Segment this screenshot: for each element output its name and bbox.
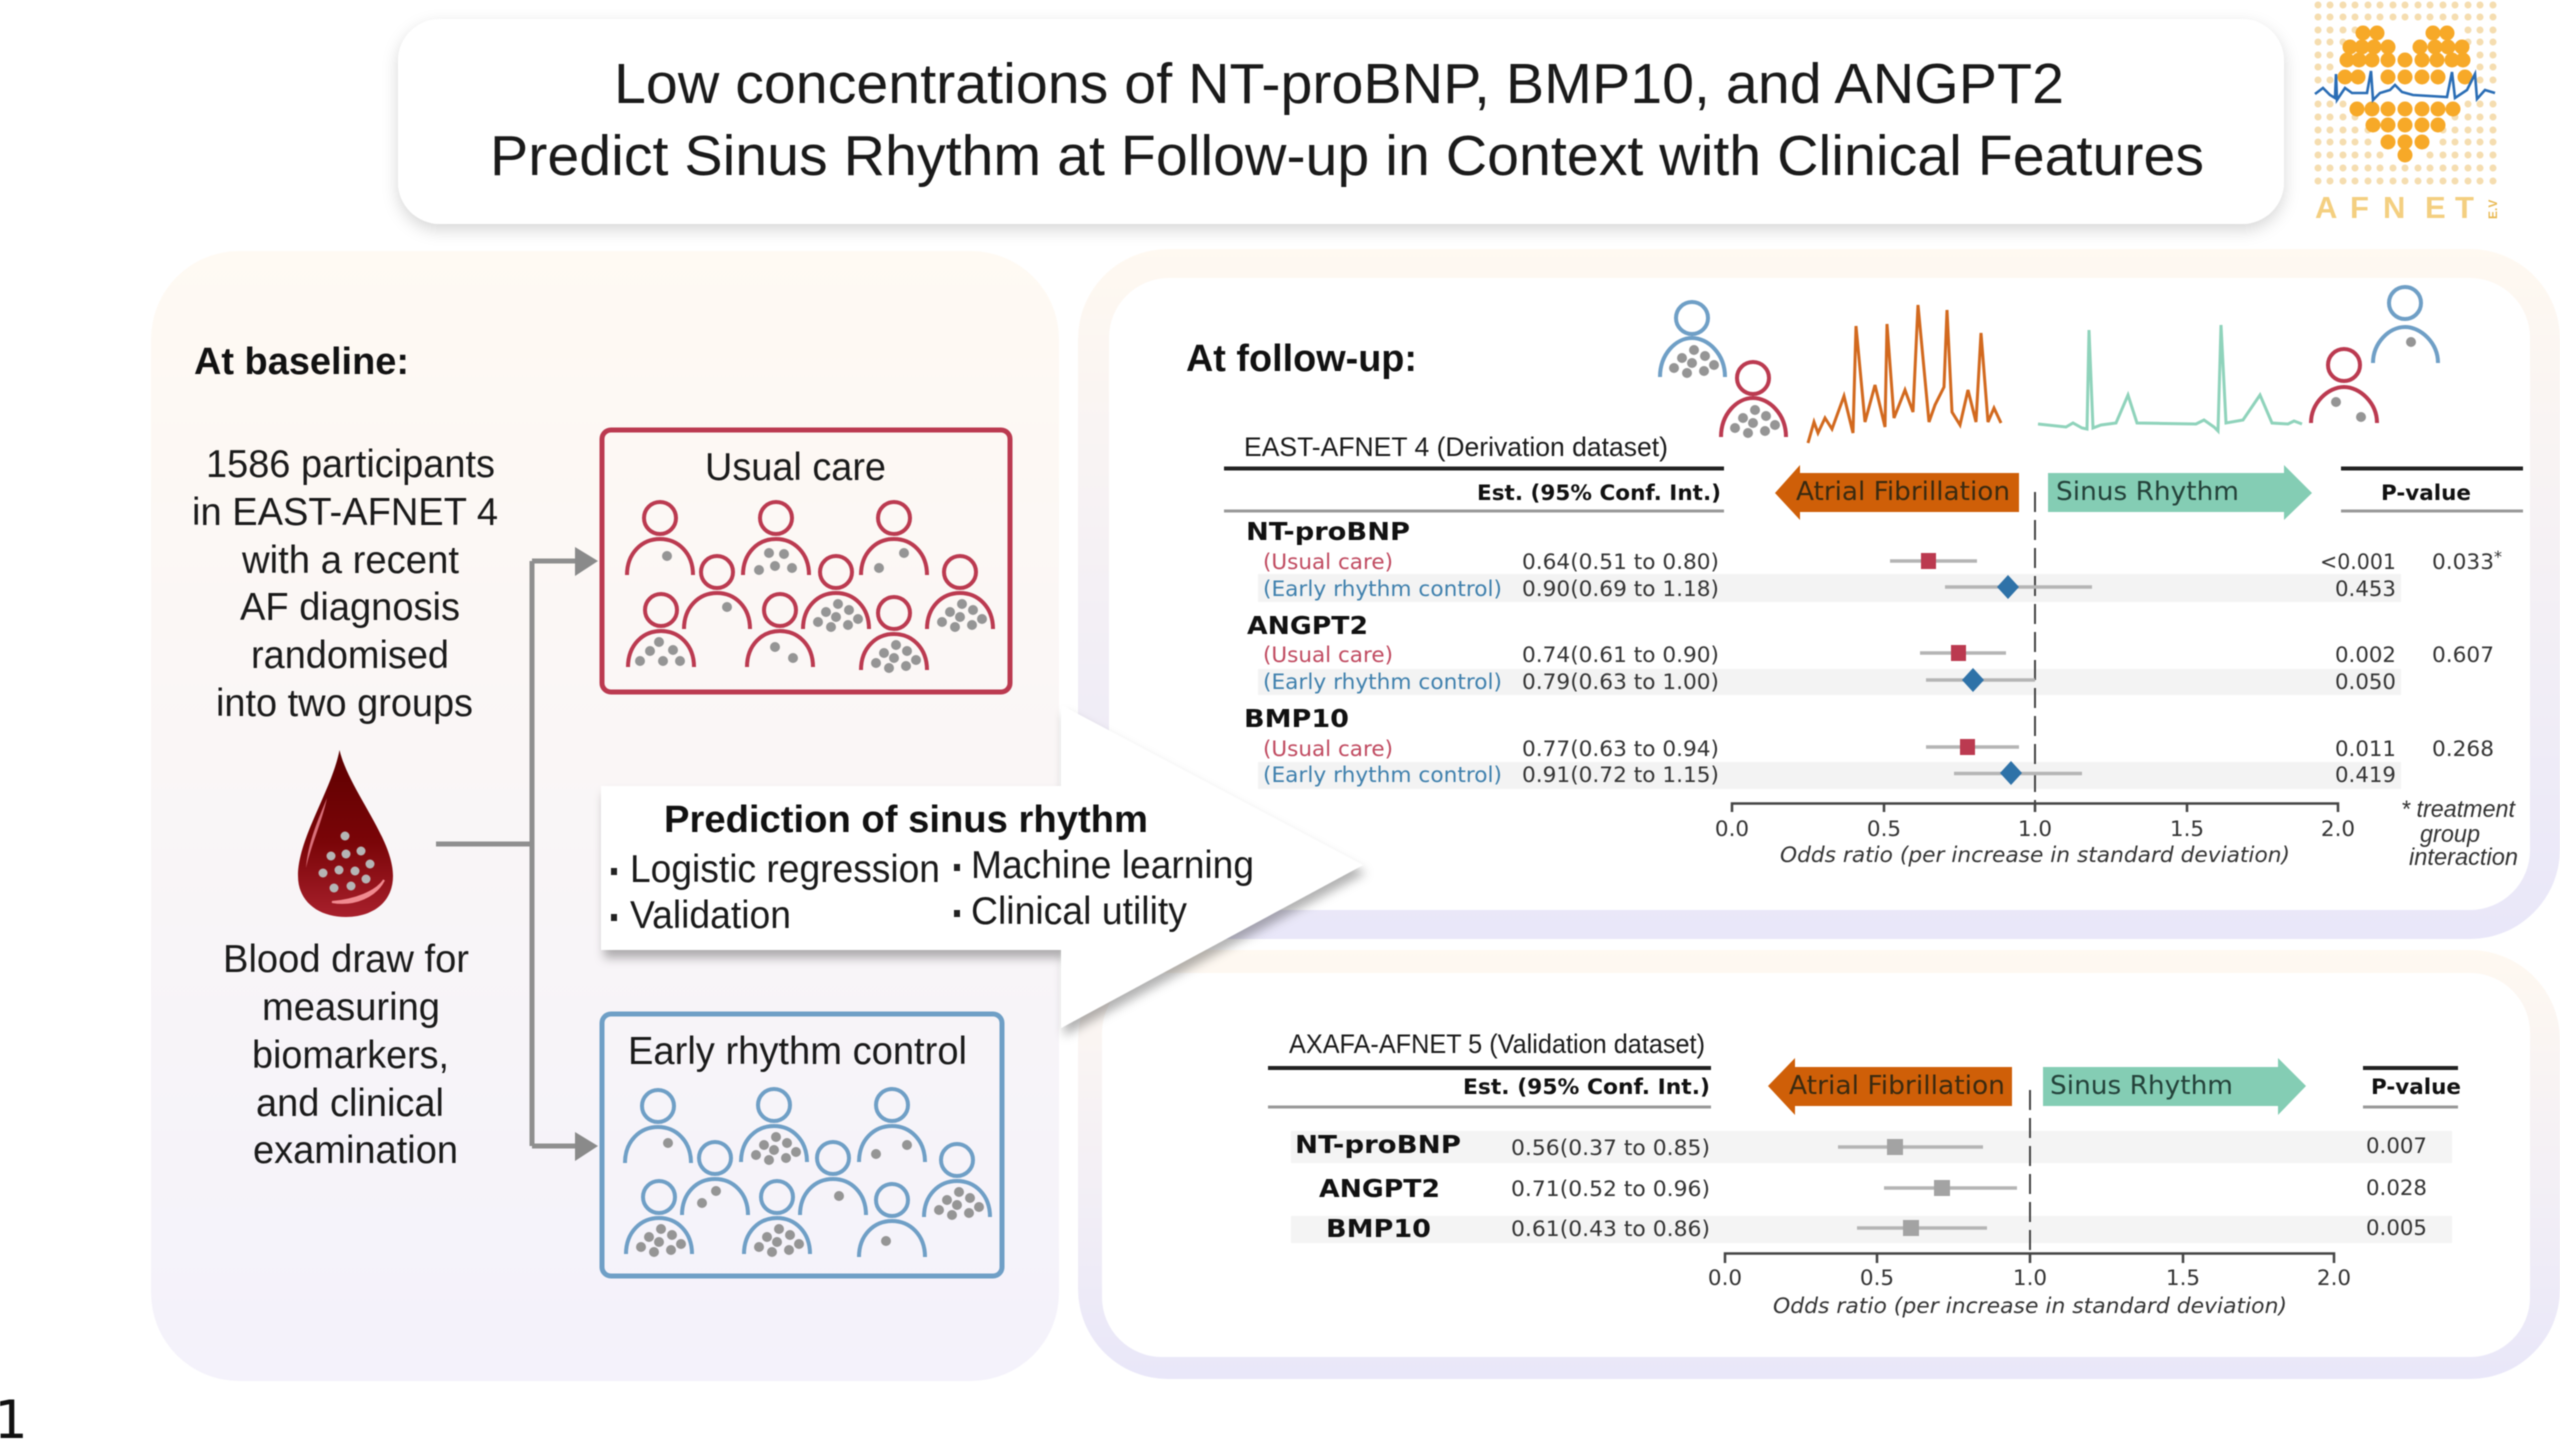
people: usual care xyxy=(627,502,993,673)
table rows: NT-proBNP: (Early rhythm control) xyxy=(1263,577,1502,602)
title text: Low concentrations of NT-proBNP, BMP10, and ANGPT2 xyxy=(614,52,2064,116)
x axis: derivation: 0.0 xyxy=(1715,817,1749,842)
table rows: ANGPT2: 0.74(0.61 to 0.90) xyxy=(1522,643,1719,668)
heading: at baseline: At baseline: xyxy=(194,341,409,383)
table rows: ANGPT2: 0.79(0.63 to 1.00) xyxy=(1522,670,1719,695)
row stripes xyxy=(1291,1131,2452,1243)
column header: estimate: Est. (95% Conf. Int.) xyxy=(1463,1075,1710,1100)
x axis: validation: Odds ratio (per increase in standard deviation) xyxy=(1773,1294,2287,1319)
table rows: NT-proBNP: <0.001 xyxy=(2320,550,2396,575)
table rows: NT-proBNP: * xyxy=(2494,547,2502,566)
column header: estimate: Est. (95% Conf. Int.) xyxy=(1477,481,1721,506)
x axis: validation xyxy=(1708,1254,2351,1319)
text: participants description xyxy=(192,443,498,725)
table rows: BMP10: 0.77(0.63 to 0.94) xyxy=(1522,737,1719,762)
callout methods list: Machine learning xyxy=(971,844,1254,887)
text: participants description: randomised xyxy=(251,634,449,677)
table rows: NT-proBNP: 0.64(0.51 to 0.80) xyxy=(1522,550,1719,575)
arrows: randomisation connector xyxy=(436,547,598,1161)
column header: p-value: P-value xyxy=(2371,1075,2461,1100)
arrow: sinus rhythm: Sinus Rhythm xyxy=(2050,1071,2233,1101)
callout: prediction of sinus rhythm xyxy=(601,705,1363,1028)
row stripes xyxy=(1258,574,2401,789)
arrow: atrial fibrillation: Atrial Fibrillation xyxy=(1796,477,2010,507)
x axis: derivation: 0.5 xyxy=(1867,817,1901,842)
footnote: treatment group interaction: group xyxy=(2420,822,2480,848)
table rows: validation biomarkers: NT-proBNP xyxy=(1295,1130,1461,1159)
text: blood draw description: Blood draw for xyxy=(223,938,469,981)
table rows: ANGPT2: (Usual care) xyxy=(1263,643,1393,668)
icon: sinus rhythm ECG xyxy=(2038,325,2302,431)
table rows: validation biomarkers: 0.56(0.37 to 0.85) xyxy=(1511,1136,1710,1161)
text: participants description: AF diagnosis xyxy=(240,586,460,629)
panel: validation dataset xyxy=(1078,950,2560,1379)
table rows: validation biomarkers: 0.005 xyxy=(2366,1216,2427,1241)
table rows: BMP10: 0.268 xyxy=(2432,737,2494,762)
x axis: derivation: Odds ratio (per increase in standard deviation) xyxy=(1780,843,2290,868)
table rows: validation biomarkers xyxy=(1295,1130,2427,1243)
table rows: NT-proBNP: 0.453 xyxy=(2335,577,2396,602)
table rows: NT-proBNP: 0.033 xyxy=(2432,550,2494,575)
callout heading: Prediction of sinus rhythm xyxy=(664,799,1148,841)
arrow: sinus rhythm xyxy=(2043,1058,2306,1115)
heading: derivation dataset: EAST-AFNET 4 (Derivation dataset) xyxy=(1244,432,1668,462)
table rows: validation biomarkers: 0.61(0.43 to 0.86) xyxy=(1511,1217,1710,1242)
table rows: BMP10: BMP10 xyxy=(1244,704,1349,733)
x axis: derivation: 2.0 xyxy=(2321,817,2355,842)
table rows: validation biomarkers: 0.028 xyxy=(2366,1176,2427,1201)
table rows: NT-proBNP: NT-proBNP xyxy=(1246,517,1410,546)
text: participants description: into two groups xyxy=(216,682,473,725)
column header: p-value: P-value xyxy=(2381,481,2471,506)
panel: usual care group xyxy=(602,430,1010,692)
footnote: treatment group interaction xyxy=(2401,797,2518,871)
table rows: BMP10 xyxy=(1244,704,2494,788)
arrow: sinus rhythm xyxy=(2048,465,2312,520)
icon: AFNET logo: E.V xyxy=(2486,200,2500,219)
title text: Predict Sinus Rhythm at Follow-up in Context with Clinical Features xyxy=(490,124,2204,188)
table rows: validation biomarkers: ANGPT2 xyxy=(1319,1174,1440,1203)
table rows: ANGPT2: 0.002 xyxy=(2335,643,2396,668)
callout methods list: Clinical utility xyxy=(971,890,1188,933)
arrow: atrial fibrillation xyxy=(1775,465,2019,520)
table rows: ANGPT2 xyxy=(1247,611,2494,695)
icon: patients with high biomarkers xyxy=(1660,302,1786,438)
panel: early rhythm control group xyxy=(602,1014,1002,1276)
table rows: NT-proBNP: 0.90(0.69 to 1.18) xyxy=(1522,577,1719,602)
footnote: treatment group interaction: * treatment xyxy=(2401,797,2516,823)
table rows: ANGPT2: 0.050 xyxy=(2335,670,2396,695)
heading: at follow-up: At follow-up: xyxy=(1186,338,1417,380)
people: early rhythm control xyxy=(625,1089,990,1257)
table rows: ANGPT2: 0.607 xyxy=(2432,643,2494,668)
label: usual care: Usual care xyxy=(705,446,886,489)
table rows: NT-proBNP xyxy=(1246,517,2502,602)
x axis: validation: 2.0 xyxy=(2317,1266,2351,1291)
icon: atrial fibrillation ECG xyxy=(1808,305,2001,443)
table rules xyxy=(1268,1068,2458,1107)
table rows: BMP10: 0.91(0.72 to 1.15) xyxy=(1522,763,1719,788)
x axis: validation: 0.0 xyxy=(1708,1266,1742,1291)
heading: validation dataset: AXAFA-AFNET 5 (Validation dataset) xyxy=(1289,1029,1705,1059)
table rows: validation biomarkers: BMP10 xyxy=(1326,1214,1431,1243)
table rows: ANGPT2: (Early rhythm control) xyxy=(1263,670,1502,695)
footnote: treatment group interaction: interaction xyxy=(2409,845,2518,871)
x axis: derivation: 1.5 xyxy=(2170,817,2204,842)
table rows: validation biomarkers: 0.007 xyxy=(2366,1134,2427,1159)
arrow: atrial fibrillation xyxy=(1768,1058,2012,1115)
table rows: BMP10: 0.419 xyxy=(2335,763,2396,788)
forest plot: derivation xyxy=(1890,492,2092,803)
table rows: validation biomarkers: 0.71(0.52 to 0.96) xyxy=(1511,1177,1710,1202)
text: blood draw description: examination xyxy=(253,1129,458,1172)
title text xyxy=(490,52,2204,188)
x axis: validation: 1.5 xyxy=(2166,1266,2200,1291)
forest plot: validation xyxy=(1838,1090,2030,1253)
text: blood draw description: and clinical xyxy=(256,1082,444,1125)
text: participants description: with a recent xyxy=(241,539,459,582)
text: blood draw description xyxy=(223,938,469,1172)
text: blood draw description: biomarkers, xyxy=(252,1034,449,1077)
callout methods list xyxy=(611,844,1254,937)
x axis: derivation xyxy=(1715,804,2355,868)
arrow: sinus rhythm: Sinus Rhythm xyxy=(2056,477,2239,507)
callout methods list: Validation xyxy=(630,894,791,937)
table rows: BMP10: (Early rhythm control) xyxy=(1263,763,1502,788)
icon: AFNET logo: AFNET xyxy=(2315,190,2474,225)
icon: blood drop xyxy=(298,750,393,917)
table rows: BMP10: 0.011 xyxy=(2335,737,2396,762)
text: participants description: 1586 participants xyxy=(206,443,495,486)
text: participants description: in EAST-AFNET 4 xyxy=(192,491,498,534)
x axis: validation: 1.0 xyxy=(2013,1266,2047,1291)
arrow: atrial fibrillation: Atrial Fibrillation xyxy=(1789,1071,2005,1101)
icon: patients with low biomarkers xyxy=(2311,287,2438,423)
label: early rhythm control: Early rhythm control xyxy=(628,1030,967,1073)
icon: AFNET logo xyxy=(2315,5,2500,225)
table rules xyxy=(1224,468,2523,511)
x axis: derivation: 1.0 xyxy=(2018,817,2052,842)
x axis: validation: 0.5 xyxy=(1860,1266,1894,1291)
title card xyxy=(398,19,2284,224)
panel: at follow-up, derivation dataset xyxy=(1078,249,2560,939)
text: blood draw description: measuring xyxy=(262,986,440,1029)
table rows: NT-proBNP: (Usual care) xyxy=(1263,550,1393,575)
callout methods list: Logistic regression xyxy=(630,848,940,891)
table rows: BMP10: (Usual care) xyxy=(1263,737,1393,762)
table rows: ANGPT2: ANGPT2 xyxy=(1247,611,1368,640)
